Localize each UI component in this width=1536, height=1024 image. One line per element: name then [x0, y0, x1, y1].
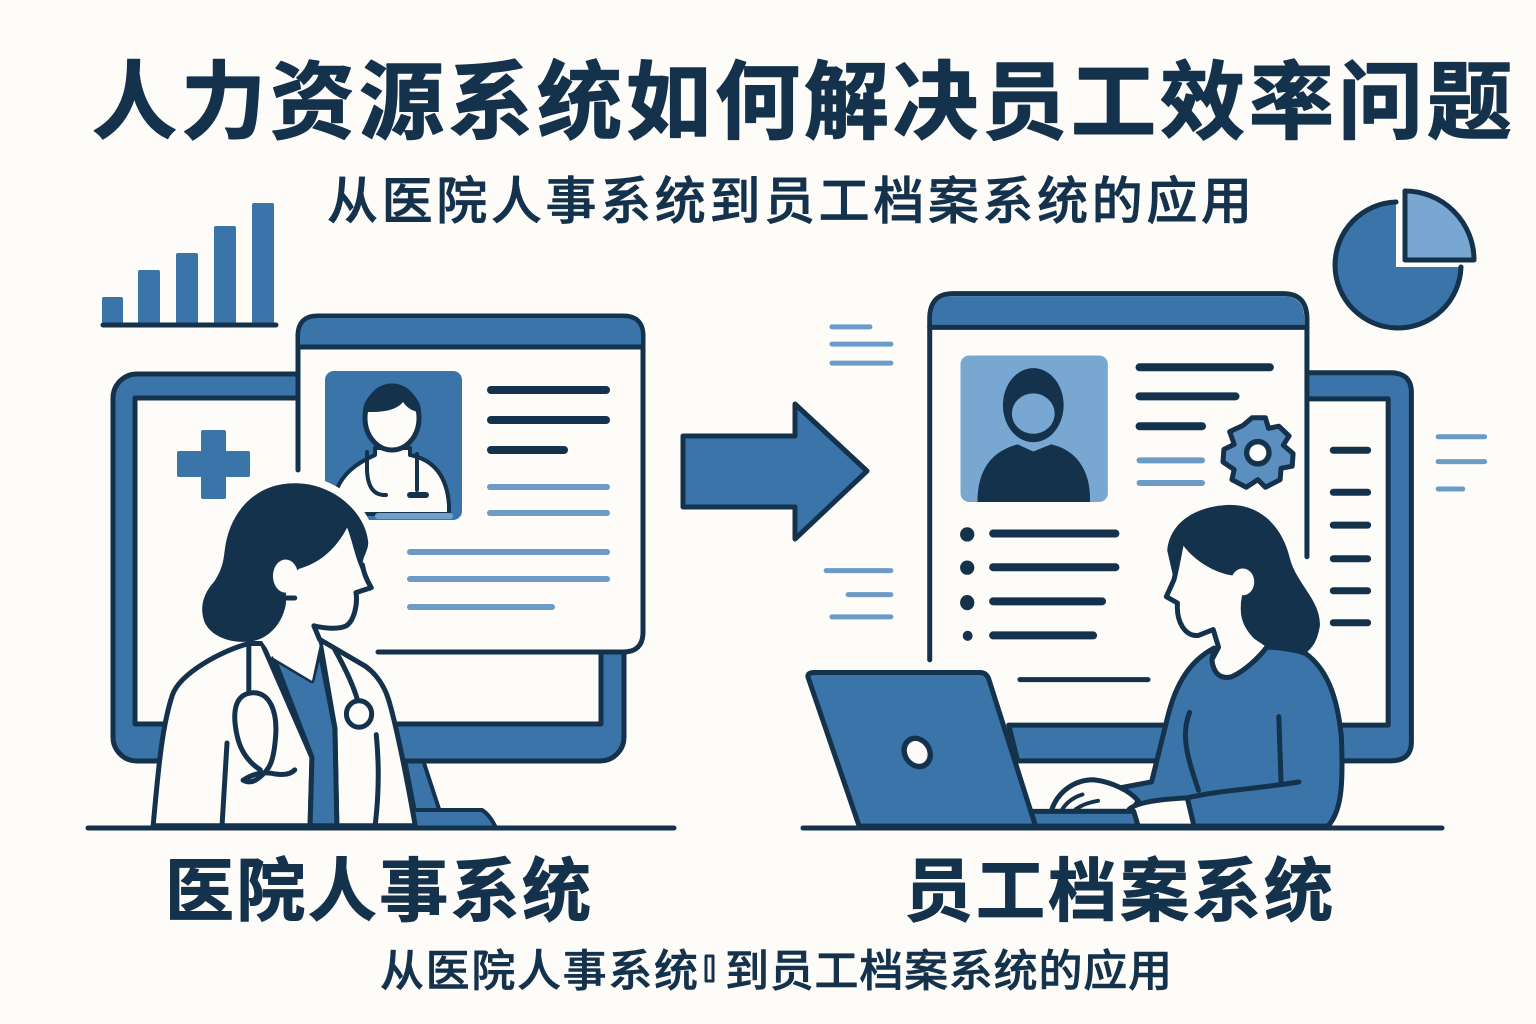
- employee photo: [961, 356, 1108, 502]
- caption: 从医院人事系统: [380, 947, 698, 996]
- text lines: [410, 390, 607, 607]
- illustration: hospital HR system: [113, 316, 643, 828]
- employee file card: [930, 294, 1307, 721]
- label: employee records system: 员工档案系统: [904, 853, 1333, 930]
- monitor: [113, 374, 624, 761]
- doctor ear: [273, 559, 298, 593]
- caption: [380, 947, 1172, 996]
- icon: pie chart: [1335, 191, 1474, 328]
- title: 人力资源系统如何解决员工效率问题: [92, 56, 1512, 151]
- label: hospital HR system: 医院人事系统: [165, 853, 591, 930]
- laptop: [808, 672, 1138, 826]
- table line right: [803, 826, 1442, 830]
- monitor stand: [405, 760, 496, 828]
- detail lines: [993, 367, 1270, 680]
- employee ear: [1231, 568, 1254, 595]
- record card: [298, 316, 643, 652]
- arrow: [683, 404, 867, 539]
- illustration: employee records system: [808, 294, 1485, 826]
- subtitle: 从医院人事系统到员工档案系统的应用: [327, 173, 1252, 230]
- table line left: [88, 826, 674, 830]
- motion lines: [826, 327, 1485, 617]
- icon: medical cross: [177, 430, 250, 499]
- employee figure: [1051, 505, 1342, 826]
- caption: 到员工档案系统的应用: [725, 947, 1172, 996]
- icon: gear: [1223, 418, 1293, 487]
- doctor figure: [153, 476, 415, 826]
- monitor: [1009, 373, 1411, 761]
- bullets: [960, 527, 974, 641]
- doctor photo: [325, 371, 462, 520]
- icon: bar chart: [102, 203, 276, 325]
